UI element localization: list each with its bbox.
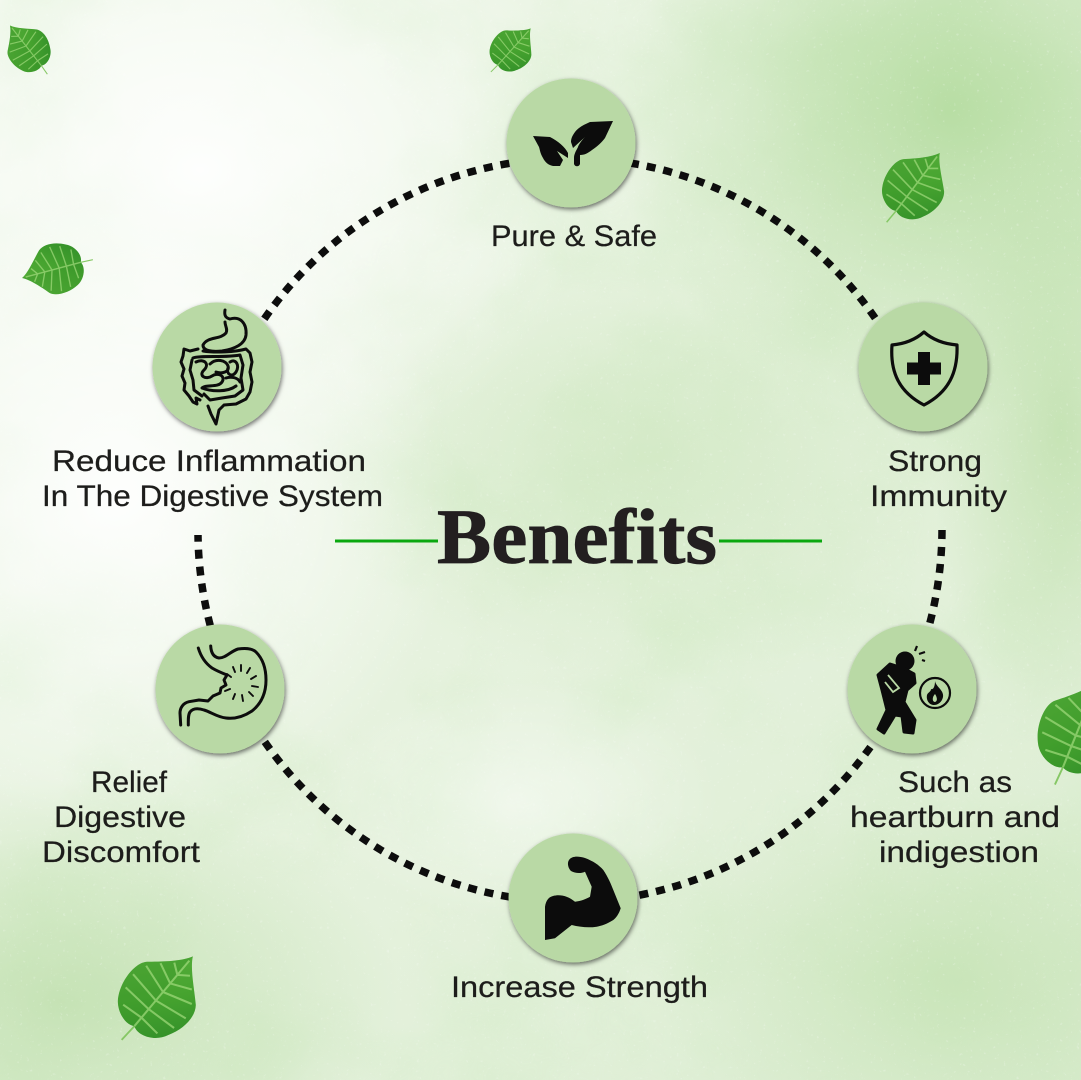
node: Relief Digestive Discomfort: Relief (91, 766, 168, 799)
node: Strong Immunity: Strong (888, 445, 982, 478)
leaf: top centre (476, 15, 546, 86)
dotted ring (198, 162, 942, 897)
node: Increase Strength: Increase Strength (451, 971, 708, 1004)
icon: stomach with pain sparks (180, 646, 266, 725)
leaf: top left (0, 12, 65, 87)
icon: shield with cross (892, 332, 957, 405)
node: Reduce Inflammation: Reduce Inflammation (52, 445, 366, 478)
node: heartburn and indigestion: indigestion (879, 836, 1039, 869)
node: Pure & Safe: Pure & Safe (491, 220, 657, 253)
icon: sprouting leaves (533, 121, 613, 166)
node: Reduce Inflammation (42, 302, 383, 513)
node: Increase Strength (451, 834, 708, 1004)
leaf: left (15, 234, 99, 302)
node: Relief Digestive Discomfort: Discomfort (42, 836, 201, 869)
icon: person with heartburn (878, 646, 950, 733)
leaf: bottom left (93, 932, 222, 1065)
node: Relief Digestive Discomfort (42, 624, 284, 869)
node: Strong Immunity (858, 302, 1007, 513)
icon: digestive system (181, 310, 252, 424)
node: Relief Digestive Discomfort: Digestive (54, 801, 186, 834)
title: Benefits with side rules: Benefits (437, 493, 717, 580)
icon: flexed arm (545, 857, 621, 940)
node: heartburn and indigestion: heartburn and (850, 801, 1060, 834)
node: Pure & Safe (491, 78, 657, 253)
node: heartburn and indigestion (848, 624, 1060, 869)
node: Reduce Inflammation: In The Digestive System (42, 480, 383, 513)
node: heartburn and indigestion: Such as (898, 766, 1012, 799)
node: Strong Immunity: Immunity (870, 480, 1007, 513)
leaf: right edge (1020, 666, 1081, 800)
leaf: upper right (863, 135, 964, 241)
